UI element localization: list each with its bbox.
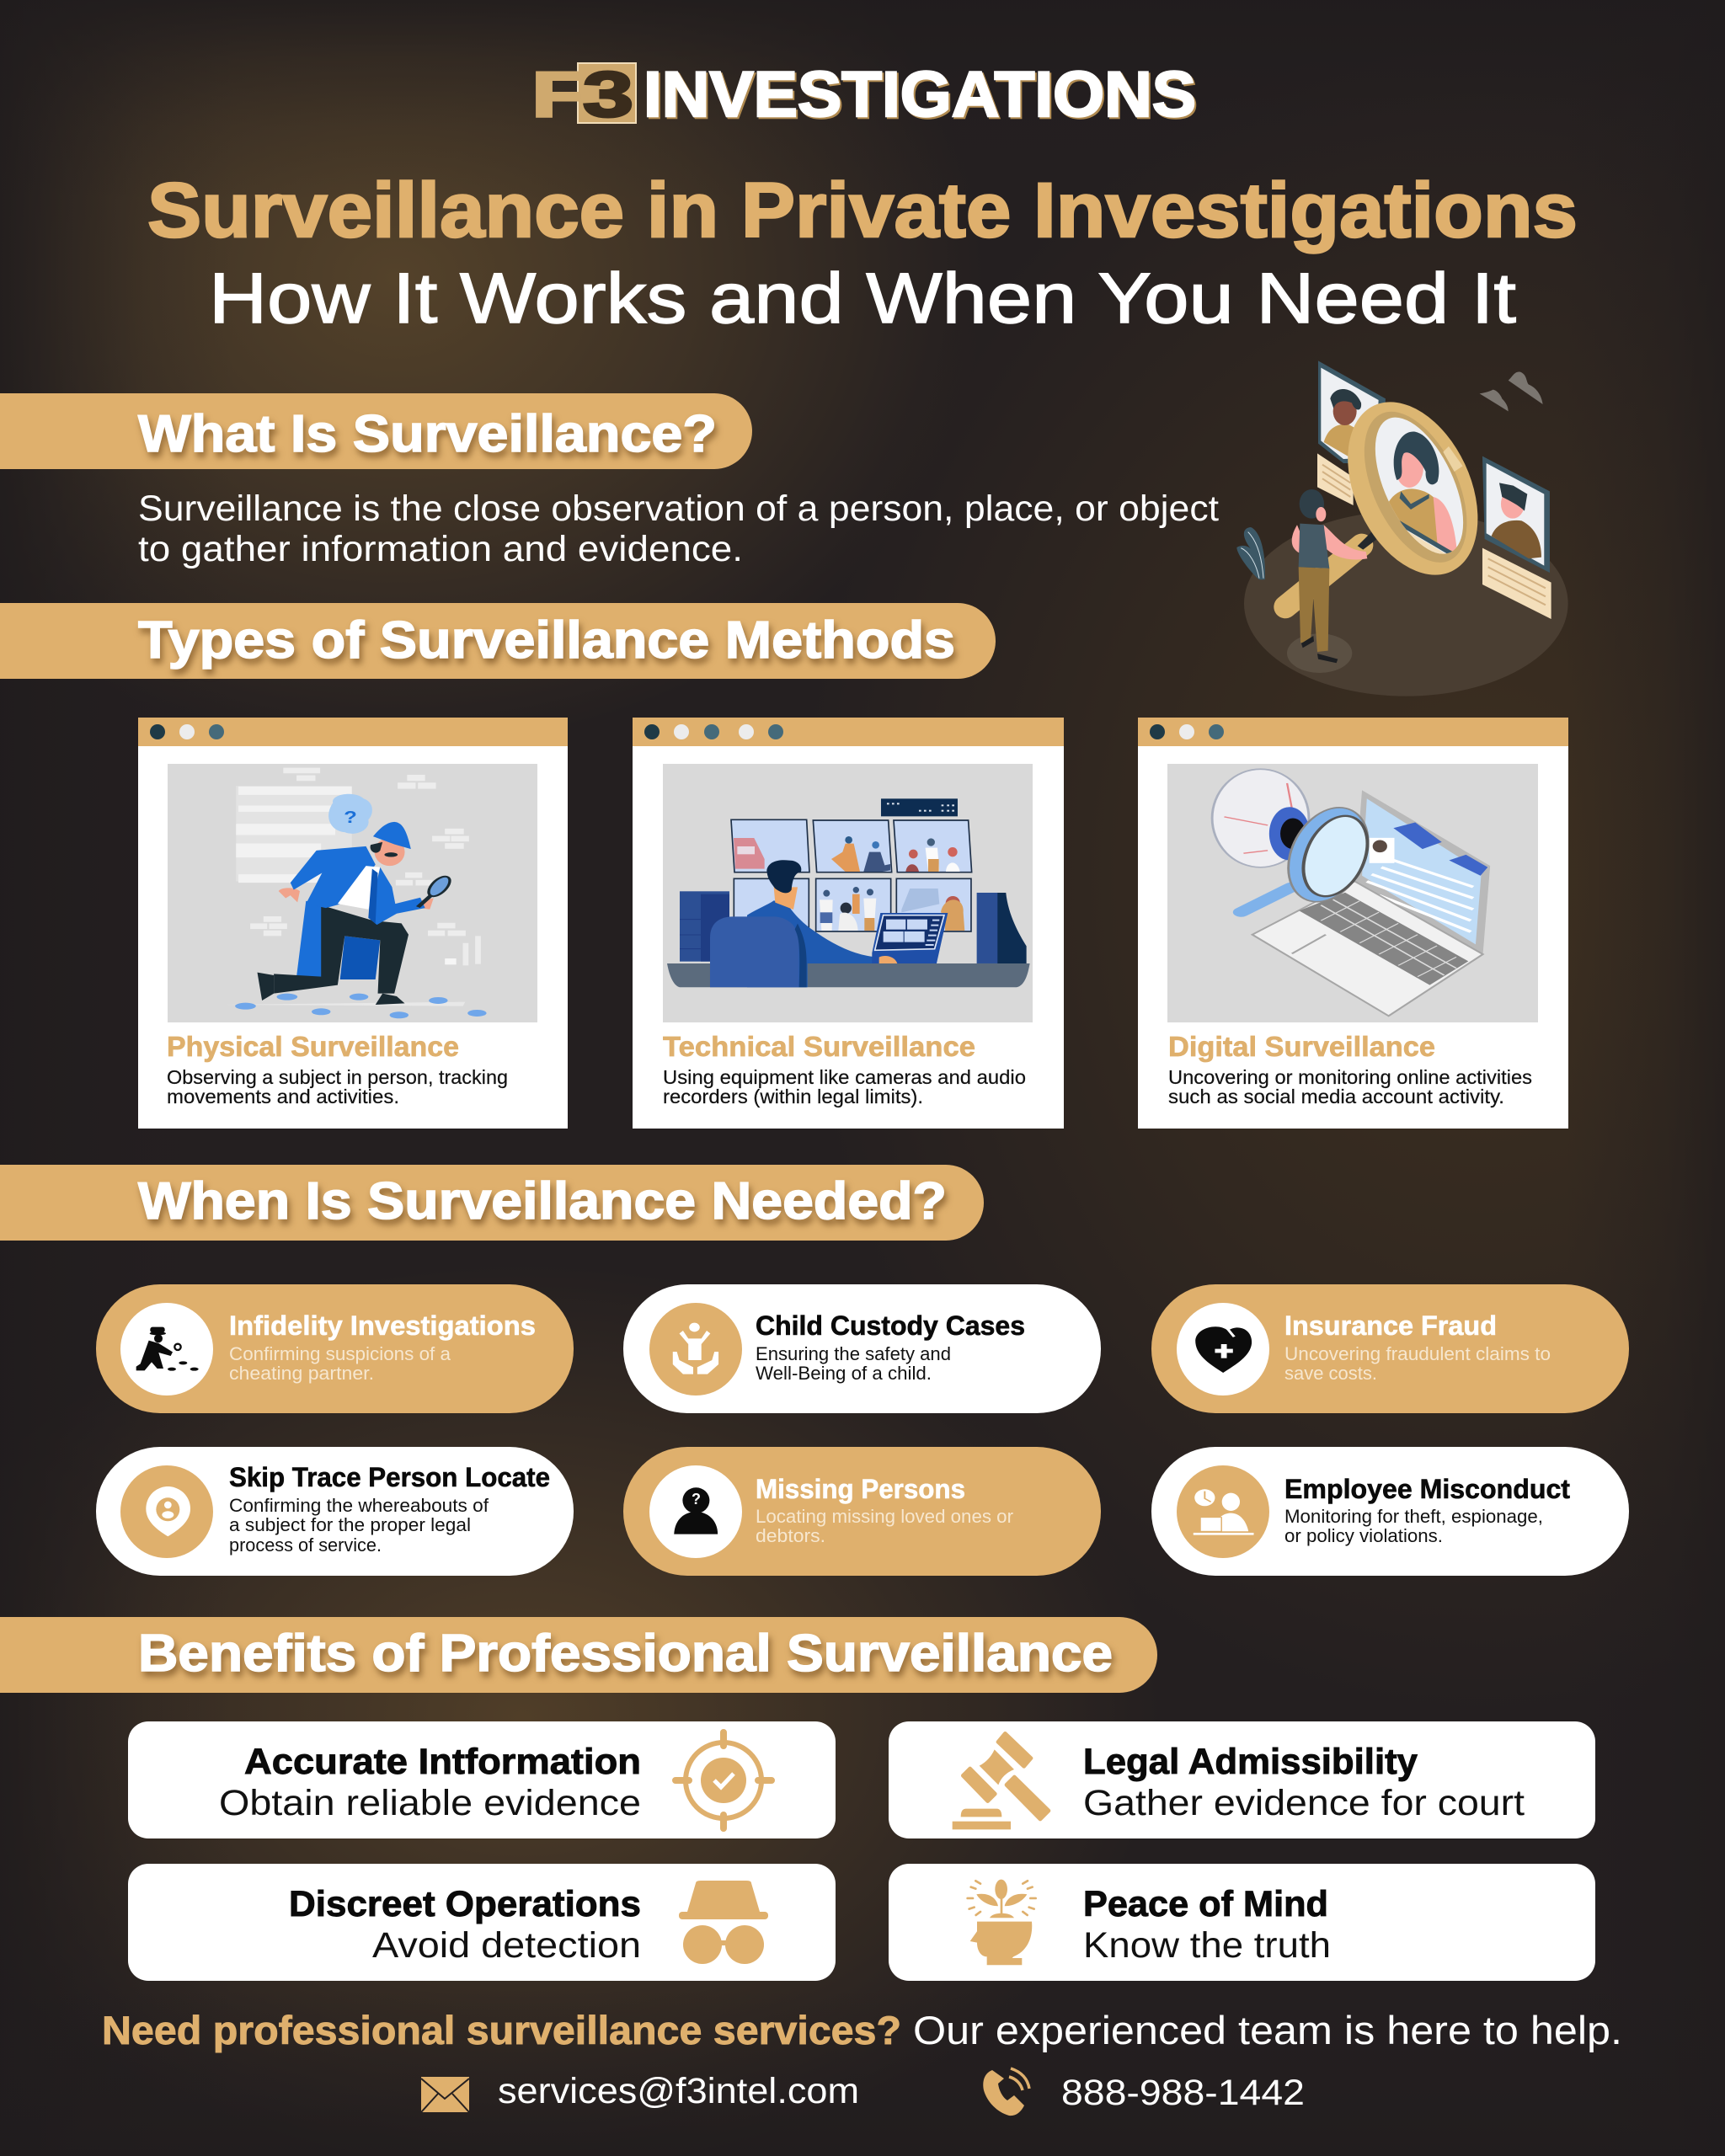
- logo: F3 Investigations: INVESTIGATIONS: [644, 59, 1196, 131]
- contact: email: services@f3intel.com: [498, 2071, 859, 2111]
- card: Physical Surveillance: movements and activities.: [167, 1086, 399, 1107]
- benefit: Accurate Information: [128, 1721, 836, 1838]
- benefit: Peace of Mind: [889, 1864, 1595, 1981]
- call to action: Need professional surveillance services?: [102, 2008, 901, 2052]
- heading: What Is Surveillance?: [0, 393, 752, 469]
- pill: Child Custody Cases: Well-Being of a child.: [756, 1363, 932, 1384]
- icon: envelope: [421, 2077, 469, 2112]
- heading: Types of Surveillance Methods: Types of Surveillance Methods: [138, 611, 955, 670]
- icon: employee at desk with clock: [1194, 1489, 1254, 1535]
- benefit: Legal Admissibility: [889, 1721, 1595, 1838]
- heading: Types of Surveillance Methods: [0, 603, 996, 679]
- icon: target with check: [676, 1732, 772, 1828]
- icon: crouching detective: [136, 1327, 199, 1371]
- title: Surveillance in Private Investigations: [147, 168, 1578, 253]
- contact: phone: 888-988-1442: [1061, 2073, 1305, 2113]
- pill: Infidelity Investigations: Confirming suspicions of a: [229, 1343, 451, 1364]
- card: Technical Surveillance: Using equipment like cameras and audio: [663, 1066, 1026, 1088]
- icon: person with question mark: [674, 1487, 718, 1534]
- illustration: control room monitors: [667, 798, 1030, 987]
- pill: Insurance Fraud: Insurance Fraud: [1284, 1310, 1497, 1341]
- heading: When Is Surveillance Needed?: When Is Surveillance Needed?: [138, 1172, 947, 1230]
- icon: gavel: [953, 1733, 1049, 1829]
- benefit: Discreet Operations: Avoid detection: [372, 1925, 641, 1966]
- card: Technical Surveillance: Technical Surveillance: [663, 1031, 975, 1062]
- pill: Missing Persons: Missing Persons: [756, 1474, 965, 1504]
- icon: hands holding child: [673, 1323, 718, 1374]
- card: Digital Surveillance: [1138, 718, 1568, 1129]
- benefit: Legal Admissibility: Legal Admissibility: [1083, 1742, 1418, 1782]
- card: Physical Surveillance: Observing a subject in person, tracking: [167, 1066, 508, 1088]
- title: How It Works and When You Need It: [209, 259, 1516, 338]
- pill: Insurance Fraud: Uncovering fraudulent claims to: [1284, 1343, 1551, 1364]
- card: Physical Surveillance: [138, 718, 568, 1129]
- heading: When Is Surveillance Needed?: [0, 1165, 984, 1241]
- pill: Child Custody Cases: Ensuring the safety and: [756, 1343, 951, 1364]
- icon: hat and glasses: [679, 1881, 768, 1964]
- card: Digital Surveillance: Digital Surveillance: [1168, 1031, 1435, 1062]
- pill: Skip Trace Person Locate: process of service.: [229, 1534, 382, 1556]
- illustration: detective with magnifier: ?: [344, 808, 357, 827]
- pill: Skip Trace Person Locate: [96, 1447, 574, 1576]
- window dots: [150, 724, 224, 739]
- call to action: Our experienced team is here to help.: [913, 2008, 1622, 2052]
- pill: Insurance Fraud: [1151, 1284, 1629, 1413]
- pill: Child Custody Cases: [623, 1284, 1101, 1413]
- title: [147, 168, 1578, 338]
- icon: location pin with person: [146, 1486, 190, 1536]
- benefit: Legal Admissibility: Gather evidence for court: [1083, 1783, 1525, 1823]
- benefit: Accurate Information: Accurate Intformation: [244, 1742, 641, 1782]
- window dots: [1150, 724, 1224, 739]
- contact: phone: [983, 2068, 1305, 2116]
- illustration: investigator with magnifying glass and profiles: [1236, 360, 1568, 696]
- pill: Missing Persons: [623, 1447, 1101, 1576]
- text: definition of surveillance: to gather information and evidence.: [138, 529, 743, 569]
- question mark: ?: [692, 1491, 701, 1508]
- benefit: Peace of Mind: Know the truth: [1083, 1925, 1331, 1966]
- benefit: Peace of Mind: Peace of Mind: [1083, 1884, 1328, 1924]
- clouds: [1480, 371, 1543, 411]
- pill: Child Custody Cases: Child Custody Cases: [756, 1310, 1025, 1341]
- illustration: eye, magnifier and laptop: [1212, 769, 1490, 1016]
- pill: Insurance Fraud: save costs.: [1284, 1363, 1377, 1384]
- pill: Employee Misconduct: Employee Misconduct: [1284, 1474, 1570, 1504]
- card: Physical Surveillance: Physical Surveillance: [167, 1031, 459, 1062]
- logo: F3 Investigations: F: [531, 59, 587, 131]
- frame: left profile: [1317, 360, 1386, 505]
- icon: head with plant: [968, 1880, 1036, 1965]
- person: [1292, 489, 1367, 663]
- heading: What Is Surveillance?: What Is Surveillance?: [138, 405, 717, 463]
- benefit: Discreet Operations: Discreet Operations: [289, 1884, 641, 1924]
- pill: Infidelity Investigations: cheating partner.: [229, 1363, 374, 1384]
- pill: Employee Misconduct: [1151, 1447, 1629, 1576]
- pill: Employee Misconduct: or policy violations.: [1284, 1525, 1443, 1546]
- benefit: Discreet Operations: [128, 1864, 836, 1981]
- heading: Benefits of Professional Surveillance: Benefits of Professional Surveillance: [138, 1625, 1113, 1683]
- text: definition of surveillance: [138, 488, 1219, 569]
- icon: heart with plus: [1195, 1325, 1252, 1373]
- illustration: detective with magnifier: [224, 768, 487, 1018]
- icon: phone: [983, 2068, 1029, 2116]
- monitor people: [820, 836, 964, 931]
- pill: Infidelity Investigations: Infidelity Investigations: [229, 1310, 536, 1341]
- benefit: Accurate Information: Obtain reliable evidence: [219, 1783, 641, 1823]
- pill: Skip Trace Person Locate: Skip Trace Person Locate: [229, 1462, 550, 1492]
- call to action: [102, 2008, 1622, 2052]
- pill: Skip Trace Person Locate: Confirming the whereabouts of: [229, 1495, 489, 1516]
- text: definition of surveillance: Surveillance is the close observation of a person, place, or object: [138, 488, 1219, 529]
- pill: Missing Persons: Locating missing loved ones or: [756, 1506, 1013, 1527]
- logo: F3 Investigations: 3: [583, 59, 633, 131]
- card: Digital Surveillance: such as social media account activity.: [1168, 1086, 1504, 1107]
- card: Technical Surveillance: [633, 718, 1064, 1129]
- pill: Infidelity Investigations: [96, 1284, 574, 1413]
- card: Technical Surveillance: recorders (within legal limits).: [663, 1086, 923, 1107]
- frame: right profile: [1482, 456, 1551, 619]
- pill: Employee Misconduct: Monitoring for theft, espionage,: [1284, 1506, 1543, 1527]
- magnifying glass: [1285, 382, 1503, 607]
- card: Digital Surveillance: Uncovering or monitoring online activities: [1168, 1066, 1532, 1088]
- window dots: [644, 724, 783, 739]
- heading: Benefits of Professional Surveillance: [0, 1617, 1157, 1693]
- pill: Missing Persons: debtors.: [756, 1525, 825, 1546]
- pill: Skip Trace Person Locate: a subject for the proper legal: [229, 1514, 471, 1535]
